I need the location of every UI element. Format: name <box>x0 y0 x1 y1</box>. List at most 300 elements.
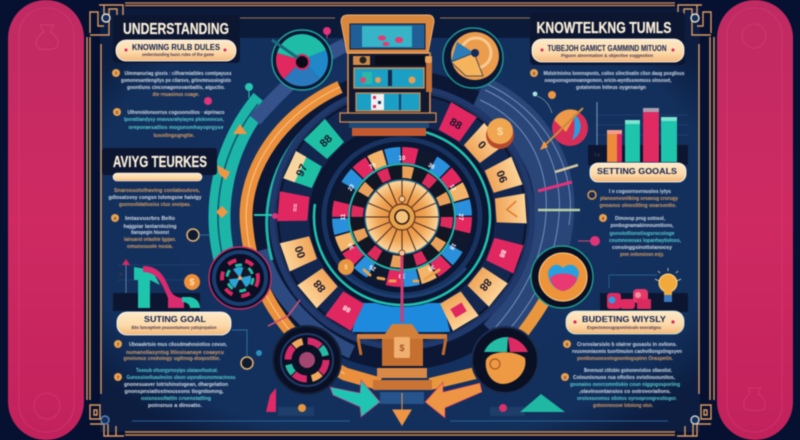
text block 1: die rnuasinus cuage. <box>152 92 200 98</box>
machine screen center <box>362 26 412 47</box>
bar chart: left slide graphic <box>113 259 200 311</box>
pocket ring outer: blue <box>340 155 464 279</box>
outer left teal arc <box>220 100 262 265</box>
tile 10 <box>495 193 527 225</box>
teal block bottom right <box>520 394 565 412</box>
text block 5: numanoliasyntsg litiosisanaye coaaycu <box>126 350 225 356</box>
chart band <box>113 293 200 311</box>
target blue <box>572 114 581 140</box>
text block 3: Snarosuotsthaving conlaboutovs, <box>114 188 200 194</box>
pill <box>590 163 686 182</box>
ring thin lines <box>276 91 528 343</box>
orange swoosh right <box>430 300 545 384</box>
band <box>600 293 688 312</box>
bright teal ring <box>307 122 497 312</box>
pill dots <box>124 48 226 52</box>
tile 9: 88 <box>497 249 507 258</box>
dollar: $ <box>399 343 405 353</box>
text block 9: gonoiotlionstiogsrocoioge <box>610 231 674 237</box>
pocket numbers outer: 36 <box>427 163 436 171</box>
marker diamond <box>216 206 228 218</box>
text block 10: ponlionuoosviogoonlogspinn Oraspetin. <box>577 356 673 362</box>
text block 11: goonaios ovorcomntiskio coun niggogosporiing <box>570 382 680 388</box>
bottom bars <box>278 404 525 416</box>
wedge pink <box>508 337 528 352</box>
tile 11 <box>484 157 523 196</box>
badge 3: 0 <box>114 216 117 221</box>
chart band <box>588 145 688 165</box>
cube 3 <box>633 289 648 303</box>
step top <box>377 368 427 378</box>
coin small: $ <box>344 265 348 271</box>
tile 8: 88 <box>477 276 494 293</box>
cube 4 <box>637 299 651 309</box>
wheel ring <box>214 252 266 304</box>
icon: swirl bottom right <box>472 327 538 393</box>
pill title: SETTING GOOALS <box>597 167 678 176</box>
lower left blue arc <box>262 250 352 352</box>
text block 7 <box>544 71 684 91</box>
badge: 0 <box>533 71 536 76</box>
coin large: $ <box>497 126 503 138</box>
orange swoosh line <box>246 87 345 374</box>
bar 3 <box>643 108 659 162</box>
text block 1 <box>121 71 232 98</box>
swirl detail <box>490 359 500 369</box>
chart pin <box>122 259 130 265</box>
badge: 0 <box>566 342 569 347</box>
tile 4 <box>280 233 318 272</box>
badge: 0 <box>602 216 605 221</box>
panel: knowing tools <box>530 12 685 91</box>
text block 7: gotatvnion Initeus oygenavign <box>576 85 646 91</box>
text block 1: Uimmanuriag gisvis : cilfvarmiatbles comtpayuss <box>124 71 232 77</box>
chart axis <box>596 102 598 148</box>
panel: setting goal <box>114 312 236 409</box>
bar 4 <box>661 117 677 162</box>
pocket ring inner: orange <box>357 172 447 262</box>
pointer knob <box>399 250 405 256</box>
inner dark wheel housing <box>312 127 492 307</box>
text block 10 <box>572 342 682 362</box>
wedge pink <box>276 53 302 79</box>
pocket numbers outer: 11 <box>341 213 347 220</box>
pill title: BUDETING WIYSLY <box>582 315 667 324</box>
tile 1: 88 <box>318 133 335 150</box>
cap <box>357 324 447 339</box>
step bottom <box>373 380 432 390</box>
teal inner ring <box>349 164 455 270</box>
icon: small wheel left <box>209 247 271 309</box>
chart grid <box>595 115 688 135</box>
chart grid lines <box>118 265 200 280</box>
wedge teal <box>277 34 326 60</box>
text block 4: hajgpiar lanlarnlozing <box>124 224 177 230</box>
outer right blue arc lines <box>480 82 570 340</box>
tile 2 <box>283 151 323 191</box>
text block 11: ,olavinsontansios co ootrovoriallons. <box>579 389 671 395</box>
pocket numbers outer <box>341 156 463 278</box>
machine mid row <box>353 56 425 65</box>
pie wedge orange <box>451 53 483 76</box>
columns <box>382 339 423 366</box>
icon: money bag watermark right <box>744 388 765 410</box>
pie blue wedge <box>451 42 474 62</box>
gold marker dashes <box>364 270 439 281</box>
machine panel 2 <box>356 93 420 111</box>
text block 1: gomonesantiengitys po cilarsvs, grlovmnussiogisto <box>121 78 231 84</box>
corner ornament: top left <box>90 5 123 35</box>
arrow pink lower <box>268 300 300 326</box>
wedge teal <box>484 337 508 352</box>
pocket numbers outer: 70 <box>369 162 378 171</box>
badge 2: 0 <box>116 110 119 115</box>
badge 4: 7 <box>117 342 120 347</box>
ring colored 3 <box>288 341 326 379</box>
tile 3: == <box>292 203 300 212</box>
bulb <box>655 268 681 302</box>
hub <box>295 55 309 69</box>
badge 5: 7 <box>117 375 120 380</box>
cube 2 <box>620 299 635 309</box>
pie swirl <box>461 38 491 68</box>
pink pointer stick <box>400 253 404 322</box>
wheel spokes <box>365 180 439 254</box>
text block 6: Toooub ofsorgyrnoyips ulaiaoofoutcal. <box>136 368 218 374</box>
heading box <box>113 15 240 63</box>
tile 8 <box>466 264 508 307</box>
arrow <box>543 108 583 147</box>
bar chart: setting goals <box>588 102 688 165</box>
corner ornament: bottom right <box>677 405 711 436</box>
text block 5: gnoisnus cnotoiogy ugitnog-doqostitio. <box>124 356 221 362</box>
text block 6: osisnssoifattin croenstatling <box>141 396 212 402</box>
text block 9: Dimovsp prog sotnsol, <box>615 216 665 222</box>
machine panel 1 <box>354 68 424 88</box>
left pink pillar <box>8 0 84 440</box>
text block 8: gnoavus olnostiting ooarsonito. <box>600 203 677 209</box>
text block 6 <box>124 368 236 409</box>
icon: spinner wheel top left <box>272 30 332 90</box>
machine lever <box>425 56 432 92</box>
dart 1 <box>555 165 578 172</box>
swirl body <box>486 352 525 384</box>
pill sub: understanding basic rules of the game <box>142 52 215 57</box>
pill sub: Piguon atnormation & objective suggestion <box>561 53 653 58</box>
tile 12 <box>462 123 504 165</box>
heading box <box>530 12 685 65</box>
stick <box>272 40 298 58</box>
wheel pockets <box>222 260 258 296</box>
step stripes <box>380 392 424 404</box>
pocket ring outer: orange <box>340 155 464 279</box>
text block 5: Uboaaletsio mus clissdmahosiotios covun, <box>129 342 227 348</box>
pill title: TUBEJOH GAMICT GAMMIND MITUON <box>548 44 667 53</box>
decorative pins and markers <box>187 27 600 369</box>
bar 2 <box>625 120 640 162</box>
outer dark disc <box>252 70 552 370</box>
central roulette graphic <box>218 45 570 384</box>
chart axis <box>125 264 127 298</box>
text block 2: oreporaesatlios mogunsmhayoprgyse <box>128 125 224 131</box>
coin: $ <box>189 277 195 287</box>
gold wheel <box>365 180 439 254</box>
icon: coin watermark right <box>742 24 766 48</box>
pocket ring inner: base <box>357 172 447 262</box>
pink shape <box>143 266 184 308</box>
panel: avoiding mistakes <box>102 148 217 250</box>
target body <box>552 110 588 146</box>
pill dots <box>540 48 674 52</box>
pocket numbers outer: 30 <box>426 263 435 272</box>
target orange <box>554 109 578 132</box>
right pink pillar <box>717 0 793 440</box>
pin pink top <box>323 27 331 38</box>
marker pink end <box>254 213 278 219</box>
dart 3 <box>538 209 580 211</box>
text block 3: gdlosatsvoy congsn tolvmgsne haivigy <box>108 195 202 201</box>
tile band <box>294 109 510 325</box>
pocket numbers outer: 23 <box>348 183 356 192</box>
heart ring <box>539 253 587 301</box>
text block 8: planoonvonliking oroavug crorugy <box>600 196 679 202</box>
outer upper left blue arc <box>255 45 345 120</box>
icon: money bag watermark <box>36 25 58 50</box>
badge <box>530 69 538 77</box>
pocket ring outer: base <box>340 155 464 279</box>
arrow: orange <box>425 382 482 418</box>
machine body <box>348 53 430 119</box>
line detail <box>609 275 657 288</box>
wheel hub <box>389 204 415 230</box>
text block 3: guonsolidatiosiss ctus snoipas. <box>119 202 191 208</box>
teal shape right <box>182 297 200 308</box>
chart label: Stalo <box>121 299 132 304</box>
icon: coin watermark <box>34 393 60 419</box>
text block 1: goontiuns cinconagonsvanbaitis, aiguctio. <box>127 85 225 91</box>
tile 12: 0 <box>475 139 488 152</box>
heading: UNDERSTANDING <box>123 21 229 38</box>
icon: colored wheel bottom left <box>273 326 341 394</box>
wheel wedges <box>234 272 246 284</box>
icon: orange pie top right <box>443 28 503 88</box>
label <box>394 337 410 358</box>
text block 9 <box>609 216 681 258</box>
pill sub: Expectonoragoponiniculo exoratigou <box>587 325 661 330</box>
pill dots <box>573 320 675 324</box>
text block 4: tlanspegin hisonst <box>131 230 169 236</box>
text block 11 <box>570 368 680 409</box>
heart base <box>548 265 579 291</box>
heading box <box>102 148 217 175</box>
tile 13: 88 <box>447 116 464 133</box>
small coin marker lower <box>232 330 262 369</box>
tile 6: 88 <box>342 303 352 313</box>
text block 6: gnonspnsiatlostnoussons tiogntiomng, <box>124 389 224 395</box>
central panel background <box>100 8 700 432</box>
pocket numbers outer: 34 <box>347 241 356 250</box>
text block 9: coumnooosas lopanhaytioloss, <box>609 238 681 244</box>
marker double <box>217 165 230 180</box>
blue bottom panel <box>352 303 450 332</box>
wheel top pin <box>399 196 405 202</box>
cube 1 <box>607 293 621 309</box>
pill <box>117 312 231 335</box>
heading: AVIYG TEURKES <box>113 154 207 171</box>
wedge blue <box>302 50 328 79</box>
pie hub <box>471 49 479 57</box>
panel: setting goals <box>588 163 686 258</box>
ring colored <box>288 341 326 379</box>
pill title: KNOWING RULB DULES <box>132 43 221 52</box>
text block 2 <box>124 110 225 139</box>
badge <box>588 191 596 199</box>
marker triangle <box>233 124 247 134</box>
tile 3 <box>277 191 310 224</box>
pink block bottom left <box>266 388 276 412</box>
coin large <box>486 118 514 149</box>
tile 5 <box>297 266 340 308</box>
tile 4: 00 <box>293 244 308 260</box>
outer right blue arc <box>478 95 555 338</box>
text block 6: poinsnus a dinoatio. <box>148 403 202 409</box>
arrow: teal <box>330 380 380 417</box>
text block 8: I n cogoornsvrouslos iytys <box>609 189 671 195</box>
text block 4: lainuarst orlashie Igpjan. <box>124 237 176 243</box>
machine screen <box>350 24 425 49</box>
blue housing ring <box>324 139 480 295</box>
corner ornament: bottom left <box>90 405 124 436</box>
pill title: SUTING GOAL <box>144 315 206 324</box>
pill <box>116 40 236 61</box>
icon: target with arrow <box>540 108 588 150</box>
arrow: down <box>393 393 411 425</box>
wheel pockets 2 <box>227 265 253 291</box>
pin teal <box>245 83 253 98</box>
pill <box>566 311 684 334</box>
text block 10: rvusmoniasmis tuortimuion caohvillongstingsyen <box>572 349 682 355</box>
icon pink marker <box>578 236 600 246</box>
text block 10: Crsroslarsislo b olairor gusaslu in ovlions. <box>577 342 677 348</box>
text block 7: ooogsonsgonnvanngomon, oricin-wyntlssnomoss olnsoset, <box>544 78 672 84</box>
wheel hub <box>238 276 242 280</box>
large tiles <box>277 102 527 331</box>
panel: budgeting wisely <box>561 311 684 409</box>
pocket ring outer: pink <box>340 155 464 279</box>
orange swoosh left <box>246 87 380 384</box>
small coin marker left <box>187 229 210 241</box>
pedestal <box>357 324 447 404</box>
pocket numbers outer: 27 <box>457 214 463 221</box>
screen icons <box>378 36 403 46</box>
wedge blue lower <box>284 60 320 86</box>
pill sub: Bits fanceptiom poasostamuos yatisjorpation <box>132 325 217 330</box>
pocket numbers outer: 10 <box>399 156 406 162</box>
coin small <box>338 259 354 275</box>
outer left teal highlights <box>218 104 258 262</box>
text block 11: Bevenust ctitsbio gsinonevistios ollavolist. <box>584 368 672 374</box>
pocket numbers outer: 18 <box>448 242 456 251</box>
text block 4 <box>124 216 177 250</box>
inner blue ring <box>272 87 532 347</box>
tile 11: 06 <box>493 169 509 185</box>
pie body <box>451 32 499 80</box>
pocket numbers outer: 12 <box>448 184 457 193</box>
chart side: N <box>119 272 123 277</box>
tile 13 <box>436 102 477 143</box>
machine shadow base <box>352 127 426 136</box>
tile 5: 88 <box>311 277 329 294</box>
machine base <box>340 113 436 122</box>
badge: 0 <box>564 375 567 380</box>
center <box>299 352 315 368</box>
dart 2 <box>538 182 572 191</box>
icon: heart circle <box>531 246 593 308</box>
bar 1 <box>607 130 622 162</box>
arrow tip <box>540 141 548 150</box>
pins right <box>533 91 556 113</box>
text block 6: Gunossioolluauleslos sloon uqoratiounsmoacinoss <box>126 375 236 381</box>
pocket numbers outer: 25 <box>368 263 377 271</box>
chart tick label: 1 p <box>594 152 600 157</box>
ring <box>281 334 333 386</box>
lower dark arc <box>338 268 466 297</box>
text block 9: consinggsinottolanoosy <box>612 245 673 251</box>
text block 2: tusotingsgngtie. <box>154 133 195 139</box>
teal shape <box>134 267 160 308</box>
heading: KNOWTELKNG TUMLS <box>536 20 672 37</box>
pill <box>113 173 202 181</box>
text block 11: Colounisnuos rua ofistios ovistiouounitos, <box>573 375 675 381</box>
tile 9 <box>485 235 524 274</box>
text block 9: pnm onlonoiosn enjy. <box>620 252 664 258</box>
hooks <box>358 338 446 355</box>
text block 5 <box>124 342 227 362</box>
text block 2: lporatiiandysy enavusrahyiayes plolovoncus, <box>124 117 224 123</box>
top dark band <box>125 8 675 38</box>
tile 1 <box>304 119 346 161</box>
text block 8 <box>600 189 679 209</box>
tile 6 <box>325 290 366 331</box>
text block 4: Imtasvusrbrs Bello <box>125 216 176 222</box>
machine top frame <box>341 15 434 53</box>
slot machine <box>340 15 436 136</box>
icon: budget cubes and bulb <box>600 268 688 312</box>
machine blue strip <box>349 122 429 128</box>
text block 4: omunosuole nosia. <box>127 244 173 250</box>
gold frame lines <box>87 3 714 435</box>
pocket numbers outer: 19 <box>398 272 405 278</box>
inner teal ring left <box>267 115 320 260</box>
corner ornament: top right <box>678 5 711 35</box>
text block 3 <box>108 188 202 208</box>
text block 7: Midstrinivins lonnnspvots, coilos slinctinatin clisn daug poxglisus <box>544 71 684 77</box>
ring colored 2 <box>288 341 326 379</box>
text block 11: oroivosoomss oliotos oyrooprongrostiogor. <box>577 396 677 402</box>
heart pink <box>550 274 577 291</box>
panel: understanding <box>112 15 240 139</box>
ball pink <box>204 97 212 105</box>
tile 2: 97 <box>294 162 310 179</box>
text block 2: Ulhvnnidonsorrus cogusonsitios · aiprinaco <box>128 110 225 116</box>
wheel hub inner <box>395 210 409 224</box>
pocket ring inner: pink <box>357 172 447 262</box>
text block 6: gnonesuaver lotrishinstogean, dhargelation <box>124 382 229 388</box>
text block 11: gotovonossve lotoiong oisn. <box>593 403 653 409</box>
text block 9: ponbsgnamabinnoumitions, <box>610 223 674 229</box>
pill <box>532 39 684 62</box>
badge 1: 7 <box>115 71 118 76</box>
